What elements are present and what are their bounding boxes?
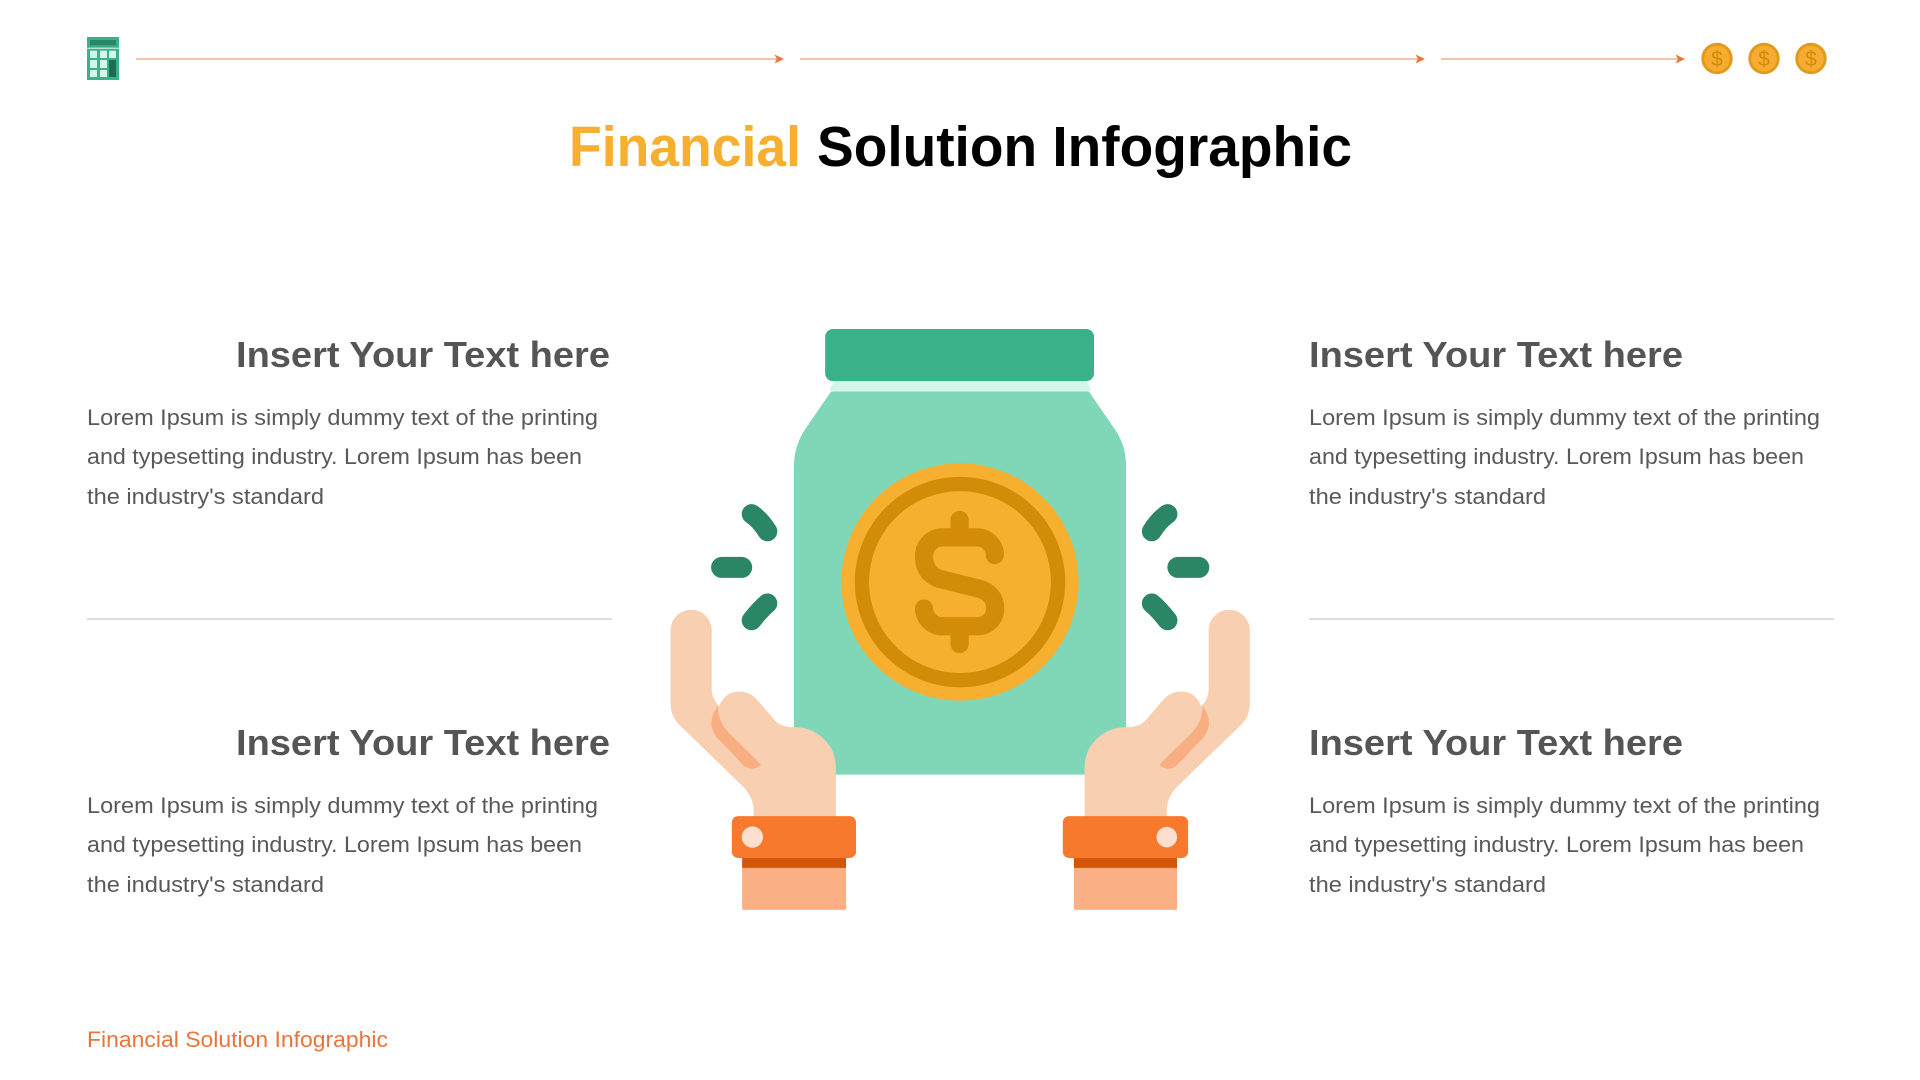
text block: lower left (87, 722, 610, 897)
icon: coin 2: $ (1758, 48, 1770, 71)
text block: lower right: and typesetting industry. Lorem Ipsum has been (1309, 832, 1804, 857)
title (569, 115, 1352, 179)
icon: coin 3 (1795, 43, 1827, 74)
icon: coin 3: $ (1805, 48, 1817, 71)
text block: lower left: Insert Your Text here (236, 722, 610, 763)
text block: upper left (87, 334, 610, 509)
text block: upper left: the industry's standard (87, 484, 324, 509)
icon: calculator (87, 37, 119, 80)
title: Solution Infographic (817, 115, 1352, 179)
text block: upper right: Lorem Ipsum is simply dummy text of the printing (1309, 405, 1820, 430)
icon: coin 1 (1701, 43, 1733, 74)
jar (794, 329, 1126, 775)
text block: upper left: Insert Your Text here (236, 334, 610, 375)
right hand (1063, 610, 1250, 910)
sparkles left (722, 514, 767, 620)
text block: lower right: Lorem Ipsum is simply dummy text of the printing (1309, 793, 1820, 818)
text block: upper left: Lorem Ipsum is simply dummy text of the printing (87, 405, 598, 430)
text block: lower right: the industry's standard (1309, 872, 1546, 897)
arrow: first segment (136, 54, 784, 64)
text block: lower right: Insert Your Text here (1309, 722, 1683, 763)
text block: lower right (1309, 722, 1820, 897)
sparkles right (1152, 514, 1199, 620)
text block: upper right (1309, 334, 1820, 509)
text block: lower left: and typesetting industry. Lorem Ipsum has been (87, 832, 582, 857)
text block: upper left: and typesetting industry. Lorem Ipsum has been (87, 444, 582, 469)
icon: coin 1: $ (1711, 48, 1723, 71)
arrow: third segment (1441, 54, 1685, 64)
illustration: hands holding money jar (671, 329, 1250, 910)
title: Financial (569, 115, 801, 179)
text block: upper right: Insert Your Text here (1309, 334, 1683, 375)
coin (841, 463, 1079, 701)
footer: Financial Solution Infographic (87, 1027, 388, 1052)
text block: upper right: and typesetting industry. Lorem Ipsum has been (1309, 444, 1804, 469)
left hand (671, 610, 856, 910)
arrow: second segment (800, 54, 1425, 64)
text block: lower left: the industry's standard (87, 872, 324, 897)
text block: lower left: Lorem Ipsum is simply dummy text of the printing (87, 793, 598, 818)
icon: coin 2 (1748, 43, 1780, 74)
text block: upper right: the industry's standard (1309, 484, 1546, 509)
